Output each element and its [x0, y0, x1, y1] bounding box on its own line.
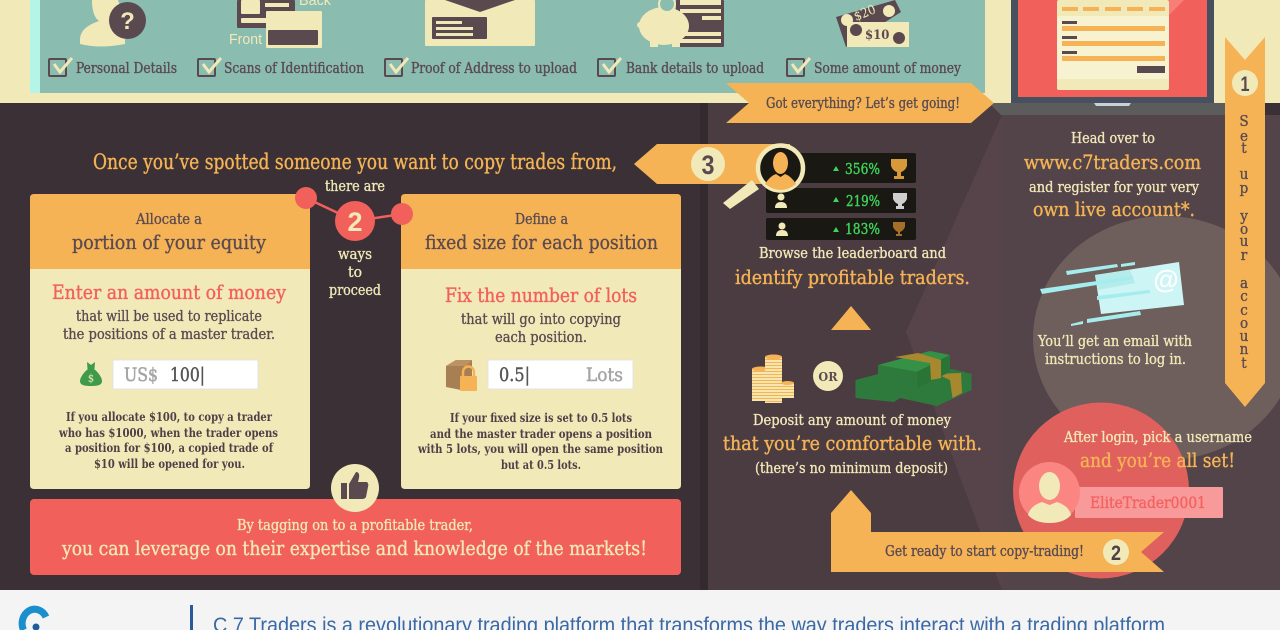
- connector: 2 ways to proceed: 2: [347, 207, 363, 237]
- checklist item: identification: [198, 58, 365, 77]
- card subheading: Fix the number of lots: [445, 284, 637, 307]
- card heading: Allocate a: [135, 212, 202, 228]
- leaderboard row 1: [766, 153, 916, 183]
- example text: with 5 lots, you will open the same position: [417, 441, 663, 456]
- ribbon: step 1 set up your account: u: [1240, 327, 1249, 345]
- text: deposit: (there’s no minimum deposit): [755, 461, 948, 477]
- text: email instructions: instructions to log in.: [1045, 352, 1186, 368]
- ribbon: step 1 set up your account: S: [1239, 112, 1249, 130]
- checklist item: bank details: [598, 58, 764, 77]
- text: pick username: and you’re all set!: [1080, 449, 1235, 472]
- checklist item: proof of address: Proof of Address to upload: [411, 61, 577, 77]
- panel: fixed size: [401, 194, 681, 489]
- icon: identification cards: Front: [229, 31, 263, 48]
- footer divider: [190, 605, 193, 630]
- checklist item: proof of address: [385, 58, 577, 77]
- input: equity amount: [113, 360, 258, 389]
- arrow: step 3: [634, 144, 790, 184]
- background: dark section: [0, 103, 1280, 590]
- ribbon: step 1 set up your account: u: [1240, 165, 1249, 183]
- icon: envelope proof of address: [425, 0, 535, 46]
- footer band: [0, 590, 1280, 630]
- text: there are: there are: [325, 179, 385, 195]
- ribbon: step 1 set up your account: e: [1240, 127, 1248, 145]
- icon: flying email: @: [1153, 264, 1179, 294]
- heading: spotted someone: Once you’ve spotted someone you want to copy trades from,: [93, 150, 617, 174]
- leaderboard row 3: 183%: [845, 220, 880, 238]
- text: browse leaderboard: [735, 246, 970, 289]
- ribbon: step 1 set up your account: c: [1240, 287, 1248, 305]
- checklist item: personal details: [49, 58, 177, 77]
- card heading: [72, 212, 266, 254]
- icon: cash stacks: [856, 351, 972, 406]
- card subheading: Enter an amount of money: [52, 281, 286, 304]
- ribbon: step 1 set up your account: o: [1240, 220, 1248, 238]
- card heading: [425, 212, 658, 254]
- panel: leaderboard and deposit column: [700, 103, 1002, 590]
- text: deposit: [723, 413, 982, 477]
- username field: EliteTrader0001: [1090, 493, 1206, 512]
- chart: leaderboard: [766, 153, 916, 240]
- callout: leverage expertise: [30, 499, 681, 575]
- checklist item: identification: Scans of Identification: [224, 61, 365, 77]
- example text: a position for $100, a copied trade of: [65, 440, 274, 455]
- card description: that will go into copying: [461, 312, 621, 328]
- callout: leverage expertise: By tagging on to a profitable trader,: [237, 518, 473, 534]
- input: lots: Lots: [586, 364, 623, 386]
- example text: If you allocate $100, to copy a trader: [66, 409, 273, 424]
- connector: 2 ways to proceed: [295, 187, 413, 241]
- icon: money bag: $: [88, 372, 94, 385]
- ribbon: step 1 set up your account: t: [1241, 139, 1247, 157]
- example text: [58, 409, 278, 471]
- ribbon: step 1 set up your account: y: [1239, 207, 1248, 225]
- card description: that will be used to replicate: [76, 309, 262, 325]
- input: lots: [488, 360, 633, 389]
- banner: got everything: [726, 83, 994, 123]
- text: ways to proceed: to: [348, 265, 362, 281]
- text: register: and register for your very: [1029, 180, 1200, 196]
- icon: thumbs up: [331, 464, 379, 512]
- icon: flying email: [1040, 262, 1184, 326]
- arrow: up triangle: [831, 306, 871, 330]
- username field: [1075, 487, 1223, 518]
- icon: personal details: [80, 0, 146, 46]
- icon: money notes: $10: [865, 28, 889, 43]
- text: email instructions: [1037, 334, 1193, 368]
- checklist item: money: [787, 58, 962, 77]
- icon: magnifying glass with trader: [723, 146, 803, 209]
- panel: allocate a portion: [30, 194, 310, 489]
- panel: checklist: [30, 0, 985, 93]
- ribbon: step 1 set up your account: t: [1241, 354, 1247, 372]
- text: ways to proceed: proceed: [329, 283, 381, 299]
- text: ways to proceed: [329, 247, 381, 299]
- arrow: step 3: 3: [702, 150, 714, 180]
- banner: got everything: Got everything? Let’s get going!: [766, 96, 960, 112]
- icon: personal details: ?: [120, 8, 135, 35]
- checklist item: personal details: Personal Details: [76, 61, 177, 77]
- example text: $10 will be opened for you.: [94, 456, 245, 471]
- text: browse leaderboard: Browse the leaderboard and: [759, 246, 946, 262]
- card description: [63, 309, 275, 343]
- leaderboard row 1: 356%: [845, 160, 880, 178]
- example text: and the master trader opens a position: [430, 426, 652, 441]
- icon: laptop: [989, 0, 1225, 115]
- leaderboard row 3: [766, 218, 916, 240]
- text: deposit: Deposit any amount of money: [753, 413, 952, 429]
- callout: leverage expertise: you can leverage on their expertise and knowledge of the markets!: [61, 537, 647, 560]
- text: email instructions: You’ll get an email with: [1037, 334, 1193, 350]
- background: top cream band: [0, 0, 1280, 103]
- arrow: step 2 ribbon: Get ready to start copy-trading!: [885, 544, 1084, 560]
- text: register: Head over to: [1071, 131, 1155, 147]
- input: lots: 0.5|: [499, 364, 530, 386]
- ribbon: step 1 set up your account: c: [1240, 301, 1248, 319]
- icon: or badge: OR: [818, 369, 838, 384]
- ribbon: step 1 set up your account: n: [1240, 340, 1249, 358]
- text: register: own live account*.: [1033, 198, 1195, 221]
- ribbon: step 1 set up your account: a: [1240, 274, 1248, 292]
- icon: or badge: [813, 361, 843, 391]
- text: browse leaderboard: identify profitable traders.: [735, 266, 970, 289]
- icon: money bag: [80, 362, 102, 386]
- card description: [461, 312, 621, 346]
- card description: the positions of a master trader.: [63, 327, 275, 343]
- input: equity amount: 100|: [170, 364, 205, 386]
- icon: footer logo: [22, 609, 46, 630]
- ribbon: step 1 set up your account: r: [1241, 246, 1248, 264]
- icon: identification cards: [229, 0, 331, 48]
- text: register: www.c7traders.com: [1024, 151, 1201, 174]
- ribbon: step 1 set up your account: 1: [1240, 73, 1250, 96]
- icon: user avatar: [1019, 462, 1080, 523]
- leaderboard row 2: 219%: [846, 192, 880, 210]
- icon: money notes: $20: [852, 2, 878, 25]
- checklist item: money: Some amount of money: [814, 61, 962, 77]
- panel: register column: [1002, 115, 1280, 590]
- card heading: fixed size for each position: [425, 231, 658, 254]
- icon: coin stacks: [752, 354, 794, 403]
- text: register: [1024, 131, 1201, 221]
- ribbon: step 1 set up your account: o: [1240, 314, 1248, 332]
- icon: locked box: [446, 360, 477, 391]
- text: pick username: After login, pick a username: [1063, 430, 1252, 446]
- ribbon: step 1 set up your account: p: [1240, 179, 1248, 197]
- card heading: portion of your equity: [72, 231, 266, 254]
- circle: username background: [1013, 402, 1189, 578]
- input: equity amount: US$: [124, 364, 158, 386]
- card description: each position.: [495, 330, 587, 346]
- example text: [417, 410, 663, 472]
- example text: but at 0.5 lots.: [501, 457, 581, 472]
- card heading: Define a: [515, 212, 568, 228]
- circle: email background: [1033, 216, 1280, 460]
- arrow: step 2 ribbon: 2: [1111, 542, 1121, 565]
- ribbon: step 1 set up your account: [1225, 37, 1265, 407]
- checklist item: bank details: Bank details to upload: [626, 61, 764, 77]
- text: pick username: [1063, 430, 1252, 472]
- leaderboard row 2: [766, 188, 916, 213]
- example text: who has $1000, when the trader opens: [58, 425, 278, 440]
- arrow: step 2 ribbon: [831, 490, 1164, 572]
- text: deposit: that you’re comfortable with.: [723, 432, 982, 455]
- icon: piggy bank and bank details: [637, 0, 724, 47]
- icon: money notes: [836, 0, 909, 47]
- example text: If your fixed size is set to 0.5 lots: [450, 410, 632, 425]
- ribbon: step 1 set up your account: u: [1240, 232, 1249, 250]
- text: ways to proceed: ways: [338, 247, 372, 263]
